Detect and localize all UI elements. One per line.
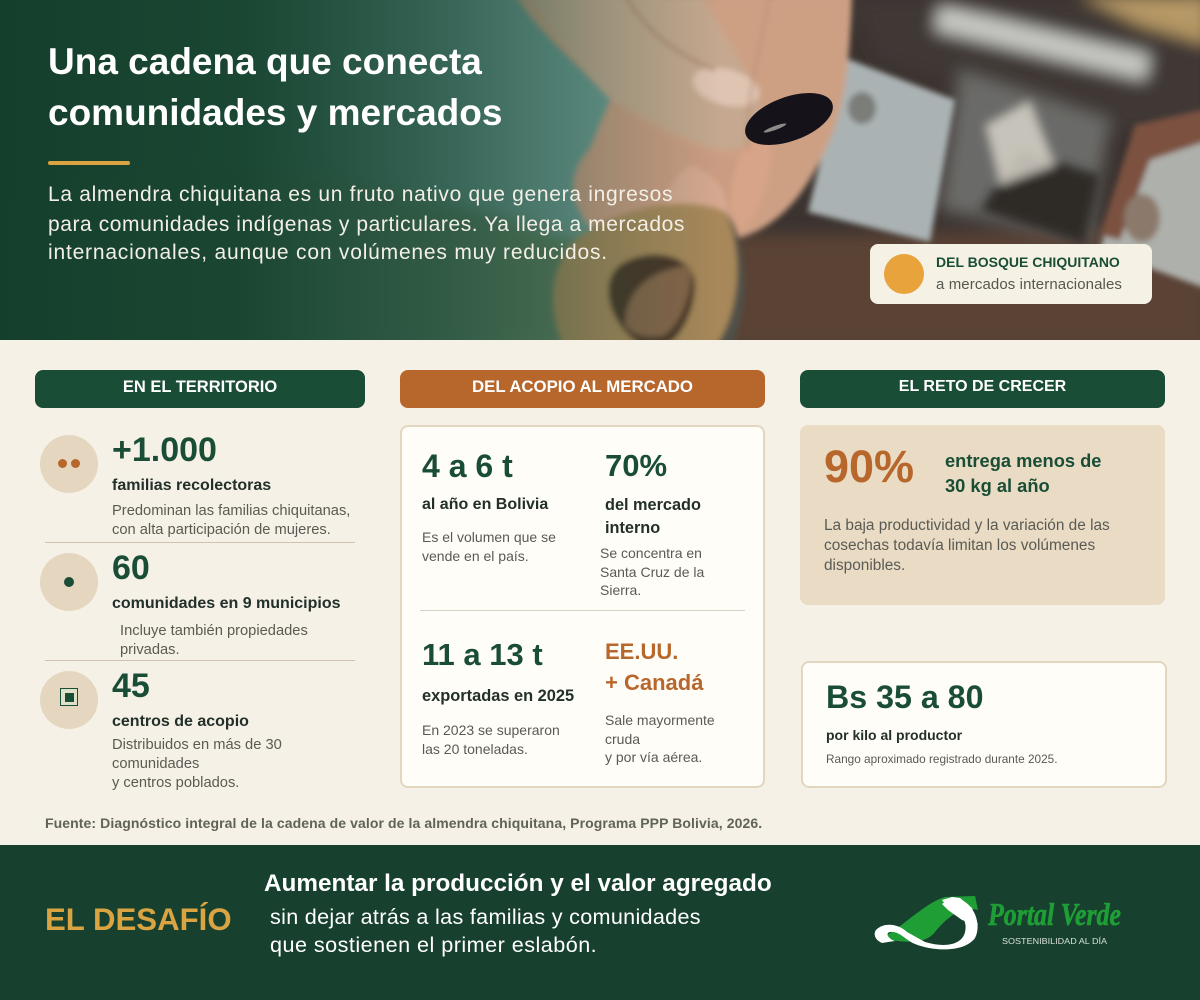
stat: internal market share: Se concentra en [600,545,702,561]
challenge text: Aumentar la producción y el valor agregado [264,870,772,897]
description: privadas. [120,642,180,658]
number: 60 [112,549,150,587]
hero intro text: La almendra chiquitana es un fruto nativo que genera ingresos [48,183,673,206]
description [120,623,308,658]
stat: volume in Bolivia: al año en Bolivia [422,496,548,513]
description: cosechas todavía limitan los volúmenes [824,537,1095,554]
stat: internal market share: interno [605,519,660,537]
origin badge [870,244,1152,304]
hero intro text [48,183,685,264]
hero title: Una cadena que conecta [48,41,482,82]
hero title: comunidades y mercados [48,92,502,133]
challenge text: sin dejar atrás a las familias y comunidades [270,904,701,929]
icon: two dots [40,435,98,493]
stat: internal market share: 70% [605,448,667,483]
description: disponibles. [824,557,905,574]
description [112,503,350,538]
label [945,450,1101,496]
hero panel [0,0,1200,340]
stat: exports 2025: En 2023 se superaron [422,722,560,738]
label: familias recolectoras [112,477,271,494]
price card [801,661,1167,788]
stat: internal market share: Santa Cruz de la [600,564,704,580]
challenge heading: EL DESAFÍO [45,902,232,937]
icon: orange circle [884,254,924,294]
stat: internal market share: Sierra. [600,582,641,598]
hero photo: hand holding seed [0,0,1200,340]
hero intro text: internacionales, aunque con volúmenes muy reducidos. [48,241,608,264]
description: y centros poblados. [112,775,239,791]
stat: volume in Bolivia [422,448,556,564]
stat: destinations: Sale mayormente [605,712,715,728]
heading bar: EL RETO DE CRECER [899,378,1066,395]
stat: exports 2025: 11 a 13 t [422,637,543,672]
stat: families [40,431,350,538]
stat: destinations: + Canadá [605,670,703,695]
stat: internal market share [600,448,704,598]
logo: Portal Verde: SOSTENIBILIDAD AL DÍA [1002,937,1108,946]
stat: exports 2025 [422,637,574,757]
footer band [0,845,1200,1000]
icon: single dot [40,553,98,611]
source note: Fuente: Diagnóstico integral de la cadena de valor de la almendra chiquitana, Programa PPP Bolivia, 2026. [45,815,762,831]
description: Incluye también propiedades [120,623,308,639]
stat: volume in Bolivia: Es el volumen que se [422,529,556,545]
heading bar: EN EL TERRITORIO [123,378,277,396]
stat: collection centres [40,667,282,791]
number: 45 [112,667,150,705]
stat: communities [40,549,340,658]
stat: destinations: y por vía aérea. [605,749,702,765]
heading bar: DEL ACOPIO AL MERCADO [472,377,693,396]
label: entrega menos de [945,450,1101,471]
market card [400,425,765,788]
stat: volume in Bolivia: vende en el país. [422,548,529,564]
label: comunidades en 9 municipios [112,595,340,612]
stat: exports 2025: exportadas en 2025 [422,687,574,705]
description: Predominan las familias chiquitanas, [112,503,350,519]
logo: Portal Verde [874,896,1121,950]
challenge text: que sostienen el primer eslabón. [270,932,597,957]
heading bar [800,370,1165,408]
description [112,737,282,791]
label: 30 kg al año [945,475,1050,496]
heading bar [35,370,365,408]
number: Bs 35 a 80 [826,679,983,715]
column: del acopio al mercado [400,370,765,788]
description: comunidades [112,756,199,772]
label: por kilo al productor [826,727,962,743]
stat: destinations: cruda [605,730,640,746]
heading bar [400,370,765,408]
column: en el territorio [35,370,365,791]
accent rule [48,161,130,165]
stat: exports 2025: las 20 toneladas. [422,741,528,757]
description: Rango aproximado registrado durante 2025. [826,752,1058,766]
icon: dark seed [738,83,840,155]
description: con alta participación de mujeres. [112,522,331,538]
stat: volume in Bolivia: 4 a 6 t [422,448,513,484]
stat: internal market share: del mercado [605,496,701,514]
description: Distribuidos en más de 30 [112,737,282,753]
description: La baja productividad y la variación de las [824,517,1110,534]
stat: destinations: EE.UU. [605,639,678,664]
column: el reto de crecer [800,370,1167,788]
badge subtext: a mercados internacionales [936,276,1122,293]
icon: framed square [40,671,98,729]
stat: destinations [605,639,715,765]
number: 90% [824,441,914,492]
number: +1.000 [112,431,217,469]
label: centros de acopio [112,713,249,730]
badge heading: DEL BOSQUE CHIQUITANO [936,254,1120,270]
productivity card [800,425,1165,605]
hero title [48,41,502,133]
hero intro text: para comunidades indígenas y particulares. Ya llega a mercados [48,213,685,236]
challenge text [264,870,772,957]
description [824,517,1110,574]
